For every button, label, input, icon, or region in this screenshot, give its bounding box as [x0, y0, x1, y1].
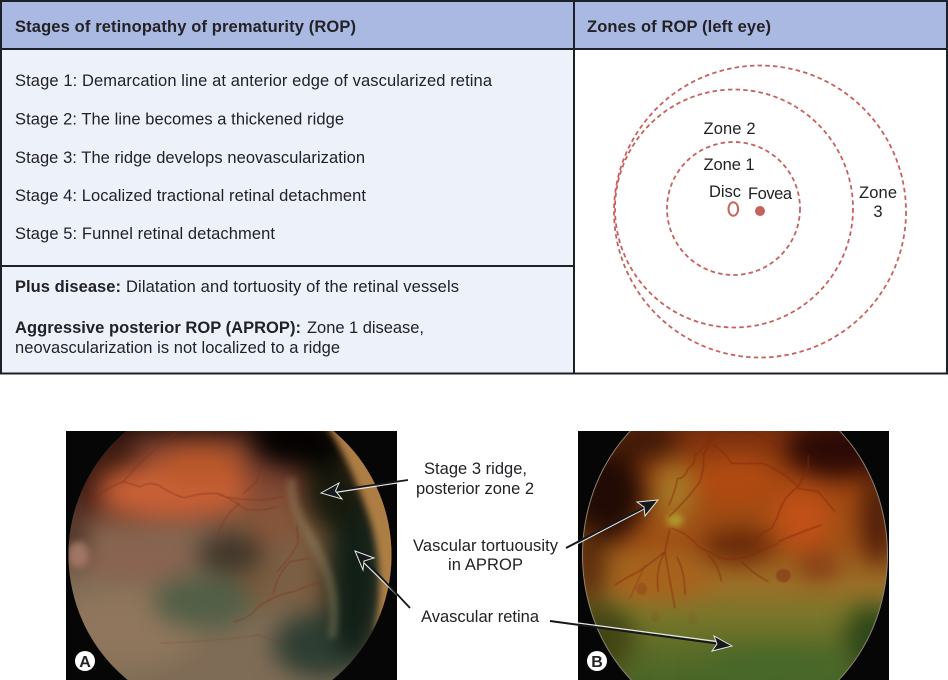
panel: stages of ROP	[0, 0, 574, 374]
callout: stage 3 ridge: posterior zone 2	[416, 480, 534, 498]
arrow: to stage 3 ridge	[321, 480, 408, 499]
badge: B: B	[591, 654, 603, 671]
arrow: to avascular retina in B	[550, 621, 732, 651]
fundus colour regions	[583, 431, 887, 672]
badge: B	[587, 651, 607, 671]
photo A: stage 3 ridge fundus	[66, 431, 397, 680]
haemorrhages	[636, 569, 791, 625]
text block: aggressive posterior ROP: Aggressive posterior ROP (APROP):	[15, 319, 301, 337]
label: zone 1: Zone 1	[704, 156, 754, 174]
callout: vascular tortuousity: Vascular tortuousity	[413, 537, 559, 555]
retinal vessels	[90, 432, 320, 644]
stage list: Stage 3: The ridge develops neovascularization	[15, 149, 365, 167]
text block: aggressive posterior ROP: Zone 1 disease,	[307, 319, 424, 337]
circle: zone 3 boundary	[614, 66, 906, 358]
text block: aggressive posterior ROP	[15, 319, 424, 357]
heading: zones of ROP: Zones of ROP (left eye)	[587, 18, 771, 36]
photo B: APROP fundus	[578, 431, 889, 680]
callout: avascular retina: Avascular retina	[421, 608, 540, 626]
text block: plus disease: Dilatation and tortuosity of the retinal vessels	[126, 278, 459, 296]
callout: vascular tortuousity: in APROP	[448, 556, 523, 574]
arrow: to avascular retina in A	[355, 551, 410, 608]
badge: A: A	[79, 654, 91, 671]
label: zone 3: Zone	[859, 184, 897, 202]
icon: optic disc	[728, 202, 738, 216]
table: stages and zones of ROP	[0, 0, 948, 374]
callout: stage 3 ridge	[416, 460, 534, 498]
stage list	[15, 72, 493, 243]
stage list: Stage 2: The line becomes a thickened ridge	[15, 110, 344, 128]
circle: zone 2 boundary	[615, 90, 853, 328]
text block: aggressive posterior ROP: neovascularization is not localized to a ridge	[15, 339, 340, 357]
stage list: Stage 4: Localized tractional retinal detachment	[15, 187, 366, 205]
fundus colour regions	[68, 431, 386, 680]
stage list: Stage 5: Funnel retinal detachment	[15, 225, 275, 243]
heading: stages of ROP: Stages of retinopathy of prematurity (ROP)	[15, 18, 356, 36]
header bar: zones	[574, 0, 948, 49]
label: zone 3: 3	[873, 203, 883, 221]
label: zone 3	[859, 184, 897, 221]
panel: zones of ROP diagram	[574, 0, 948, 374]
stage list: Stage 1: Demarcation line at anterior edge of vascularized retina	[15, 72, 493, 90]
bright spot near disc	[667, 513, 683, 527]
circle: zone 1 boundary	[667, 142, 800, 275]
badge: A	[75, 651, 95, 671]
crescent rim	[325, 431, 392, 632]
optic disc	[68, 542, 89, 568]
table grid lines	[0, 0, 948, 374]
callout: vascular tortuousity	[413, 537, 559, 574]
icon: fovea	[755, 206, 765, 216]
label: zone 2: Zone 2	[704, 120, 756, 138]
header bar: stages	[0, 0, 574, 49]
label: fovea: Fovea	[748, 185, 793, 203]
text block: plus disease: Plus disease:	[15, 278, 121, 296]
label: disc: Disc	[709, 183, 741, 201]
tortuous retinal vessels	[615, 430, 835, 608]
arrow: to vascular tortuousity	[566, 500, 658, 548]
stage 3 ridge	[291, 478, 334, 638]
callout: stage 3 ridge: Stage 3 ridge,	[424, 460, 527, 478]
